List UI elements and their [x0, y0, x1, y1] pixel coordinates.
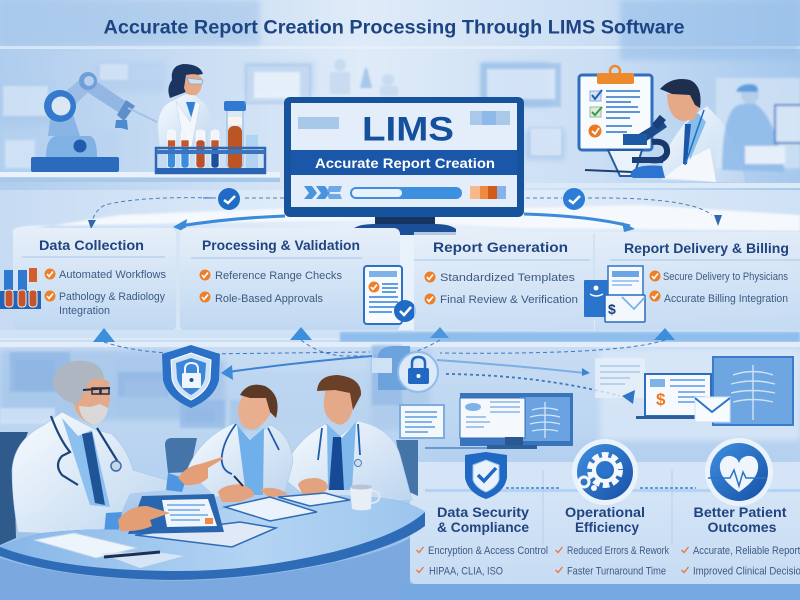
- billing monitor and x-ray: $: [656, 390, 666, 409]
- x-ray monitor with report: [425, 393, 573, 449]
- panel: Processing and Validation: [180, 228, 416, 331]
- bullet: role-based approvals: Role-Based Approvals: [215, 293, 323, 305]
- heading: Processing & Validation: [202, 237, 360, 253]
- column: data security and compliance: Data Security: [437, 504, 529, 520]
- column: data security and compliance: HIPAA, CLIA, ISO: [429, 566, 503, 578]
- doctor right: [283, 375, 412, 502]
- central LIMS monitor: [284, 97, 524, 235]
- check badge right: [563, 188, 585, 210]
- icon: security shield: [465, 452, 507, 499]
- delivery and billing icon: [584, 266, 645, 322]
- icon: patient outcomes heart: [705, 438, 773, 506]
- tablet: [118, 494, 224, 534]
- column: data security and compliance: [416, 504, 548, 578]
- scientist with test tubes: [158, 64, 215, 150]
- column: data security and compliance: & Compliance: [437, 519, 529, 535]
- title: Accurate Report Creation Processing Through LIMS Software: [104, 16, 685, 38]
- billing monitor and x-ray: [595, 357, 793, 425]
- test tube rack: [156, 101, 265, 174]
- bullet: reference range checks: Reference Range Checks: [215, 270, 342, 282]
- connector dashes lower: [104, 340, 665, 356]
- up arrow 2: [290, 327, 312, 340]
- arrow to shield: [221, 356, 372, 380]
- table: [0, 496, 425, 580]
- workflow connector arrows top: [92, 198, 712, 226]
- bottom band: [0, 538, 800, 600]
- technician at microscope: [585, 79, 745, 183]
- bullet: final review: Final Review & Verification: [440, 294, 578, 306]
- shield with lock: [162, 345, 220, 408]
- panel: Report Delivery and Billing: [584, 232, 800, 331]
- lab background screen: [246, 59, 562, 156]
- heading: Data Collection: [39, 237, 144, 253]
- column: better patient outcomes: Better Patient: [694, 504, 787, 520]
- delivery and billing icon: $: [608, 301, 616, 317]
- up arrow 1: [93, 328, 115, 342]
- bullet: standardized templates: Standardized Templates: [440, 272, 576, 284]
- arrowheads top: [88, 215, 722, 232]
- arrow lock to billing: [437, 360, 620, 396]
- blue divider band: [0, 330, 800, 347]
- monitor heading: LIMS: [362, 110, 454, 148]
- small report document: [400, 405, 444, 438]
- lower lab screens background: [0, 345, 402, 430]
- bullet: automated workflows: Automated Workflows: [59, 269, 166, 281]
- column: operational efficiency: [556, 504, 669, 578]
- background technician: [716, 78, 800, 172]
- up arrow 3: [430, 327, 449, 338]
- white floor band: [0, 172, 800, 232]
- heading: Report Generation: [433, 239, 568, 255]
- column: operational efficiency: Efficiency: [575, 519, 639, 535]
- chairs: [0, 432, 418, 545]
- column: operational efficiency: Reduced Errors & Rework: [567, 545, 669, 557]
- column: better patient outcomes: Outcomes: [708, 519, 777, 535]
- column: better patient outcomes: [682, 504, 800, 578]
- doctor middle: [187, 385, 293, 502]
- clipboard checklist: [579, 66, 652, 150]
- robot arm: [31, 72, 157, 172]
- small test tubes icon: [0, 268, 41, 309]
- heading: Report Delivery & Billing: [624, 240, 789, 256]
- report document icon: [364, 266, 416, 324]
- check badge left: [218, 188, 240, 210]
- panel: Report Generation: [414, 232, 594, 331]
- bullet: billing integration: Accurate Billing Integration: [664, 293, 788, 305]
- monitor subheading: Accurate Report Creation: [315, 155, 495, 171]
- column: data security and compliance: Encryption & Access Control: [428, 545, 548, 557]
- column: operational efficiency: Operational: [565, 504, 645, 520]
- papers on table: [34, 493, 350, 568]
- panel: benefits: [410, 438, 800, 584]
- dashed flow arrows: [506, 487, 696, 489]
- bullet: pathology and radiology: Integration: [59, 305, 110, 317]
- bullet: pathology and radiology: Pathology & Radiology: [59, 291, 165, 303]
- bullet: pathology and radiology: [44, 290, 165, 317]
- icon: operational efficiency gear: [572, 439, 638, 505]
- coffee mug: [350, 484, 379, 510]
- secure data hub with lock: [372, 346, 438, 392]
- column: operational efficiency: Faster Turnaround Time: [567, 566, 666, 578]
- up arrow 4: [654, 328, 675, 340]
- panel: Data Collection: [0, 228, 176, 331]
- doctor left pointing: [12, 361, 223, 536]
